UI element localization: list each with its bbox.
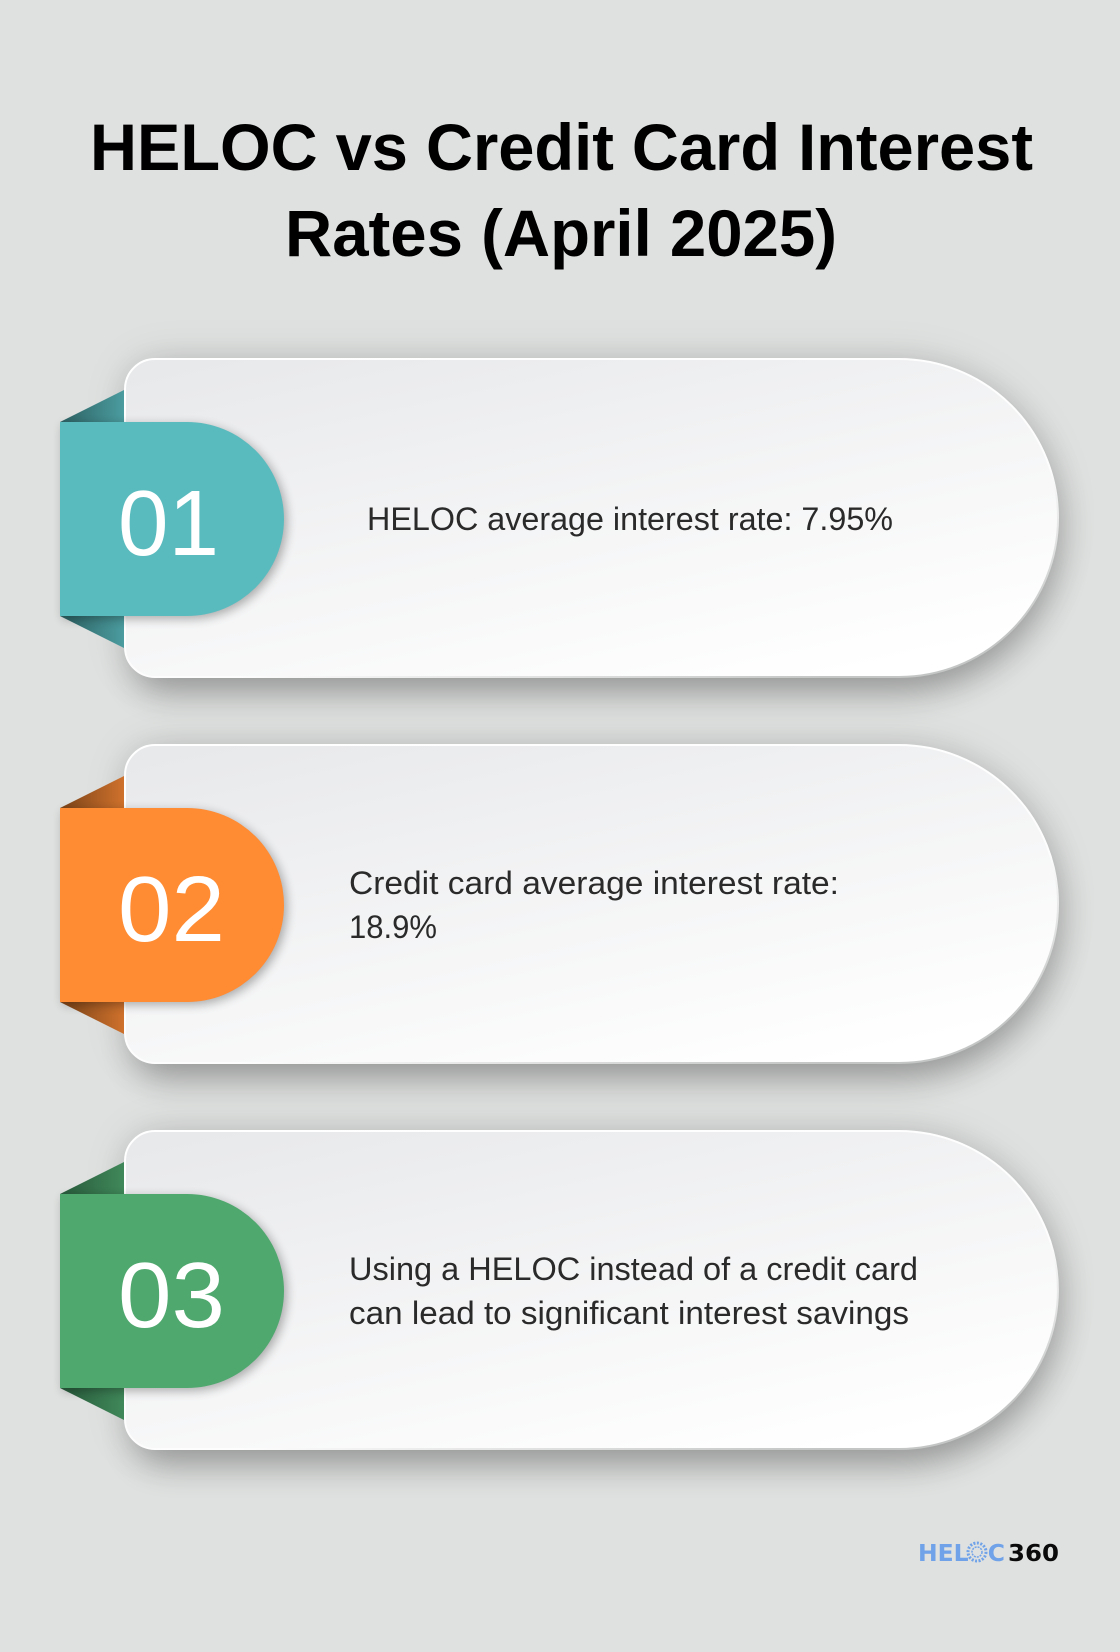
card shape	[125, 1131, 1058, 1449]
ribbon fold bottom	[60, 616, 124, 648]
number badge	[60, 422, 284, 616]
step text: Using a HELOC instead of a credit card	[349, 1251, 918, 1287]
card shape	[125, 745, 1058, 1063]
step number: 01	[118, 471, 219, 575]
ribbon fold top	[60, 776, 124, 808]
ribbon fold top	[60, 1162, 124, 1194]
logo: HELOC360: 360	[1008, 1540, 1059, 1567]
step number: 03	[118, 1243, 225, 1347]
ribbon fold top	[60, 390, 124, 422]
title	[90, 110, 1033, 270]
icon: logo ring	[968, 1543, 986, 1561]
ribbon fold bottom	[60, 1002, 124, 1034]
step number: 02	[118, 857, 225, 961]
number badge	[60, 1194, 284, 1388]
number badge	[60, 808, 284, 1002]
step text: can lead to significant interest savings	[349, 1295, 909, 1331]
card shape	[125, 359, 1058, 677]
step text: Credit card average interest rate:	[349, 865, 839, 901]
panel: step 01 HELOC rate	[60, 358, 1058, 692]
step text	[349, 865, 839, 945]
title: HELOC vs Credit Card Interest	[90, 110, 1033, 184]
logo: HELOC360	[918, 1540, 1059, 1567]
panel: step 02 credit card rate	[60, 744, 1058, 1078]
step text: HELOC average interest rate: 7.95%	[367, 501, 893, 537]
step text	[349, 1251, 918, 1331]
step text: 18.9%	[349, 909, 437, 945]
ribbon fold bottom	[60, 1388, 124, 1420]
title: Rates (April 2025)	[285, 196, 837, 270]
panel: step 03 interest savings	[60, 1130, 1058, 1464]
logo: HELOC360: HELOC	[918, 1540, 1005, 1567]
